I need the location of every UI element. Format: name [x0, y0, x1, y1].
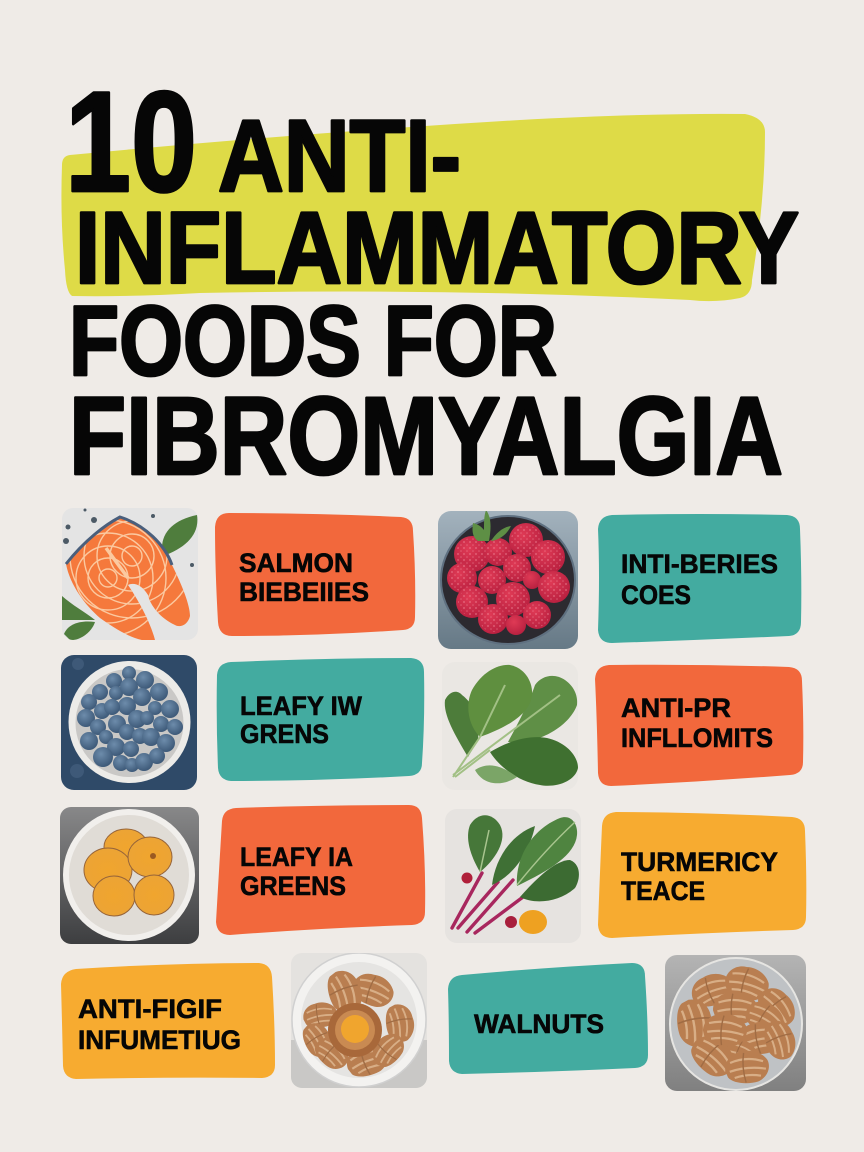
icon: lower leaf	[490, 737, 578, 786]
icon: bowl	[670, 958, 802, 1090]
panel: spinach image	[442, 662, 578, 790]
title: 10	[65, 63, 197, 222]
icon: right leaf	[508, 676, 577, 742]
icon: bowl	[68, 661, 190, 783]
icon: stems	[453, 685, 560, 777]
panel: anti-figif label: INFUMETIUG	[78, 1025, 241, 1055]
icon: chard leaves	[468, 815, 579, 901]
icon: fruit slices	[84, 829, 174, 916]
title: FOODS FOR	[69, 285, 557, 396]
panel: anti-berries label: INTI-BERIES	[621, 549, 778, 579]
panel: peaches image	[60, 807, 199, 944]
panel: leafy label one: LEAFY IW	[240, 691, 362, 721]
panel: walnuts label	[448, 963, 648, 1074]
icon: plate	[63, 809, 195, 941]
title	[65, 63, 799, 498]
icon: raspberry leaves	[473, 510, 511, 541]
icon: walnuts	[302, 970, 414, 1076]
title: ANTI-	[218, 99, 461, 213]
panel: leafy label two: GREENS	[240, 871, 346, 901]
panel: anti-berries label	[598, 514, 801, 643]
panel: anti-pr label	[595, 665, 803, 786]
panel: walnut plate image	[291, 953, 427, 1088]
panel: turmeric label: TEACE	[621, 876, 705, 906]
panel: anti-berries label: COES	[621, 580, 691, 610]
panel: anti-pr label: ANTI-PR	[621, 693, 731, 723]
panel: walnut bowl image	[665, 955, 806, 1091]
panel: walnuts label: WALNUTS	[474, 1009, 604, 1039]
icon: walnuts	[677, 966, 796, 1084]
panel: chard image	[445, 809, 581, 943]
panel: turmeric label	[598, 812, 806, 938]
panel: leafy label two: LEAFY IA	[240, 842, 353, 872]
panel: anti-figif label	[61, 963, 275, 1079]
panel: salmon label: SALMON	[239, 548, 353, 578]
title highlight	[61, 114, 765, 301]
icon: raspberries	[447, 523, 570, 635]
icon: berries and fruit	[462, 872, 547, 934]
icon: bowl	[441, 516, 575, 644]
icon: central yolk	[328, 1003, 382, 1057]
panel: salmon label: BIEBEIIES	[239, 577, 369, 607]
icon: left leaf	[445, 692, 478, 757]
panel: leafy label two	[216, 805, 425, 935]
panel: anti-figif label: ANTI-FIGIF	[78, 994, 222, 1024]
icon: small leaf	[475, 765, 517, 783]
panel: turmeric label: TURMERICY	[621, 847, 778, 877]
icon: salmon steak	[64, 515, 190, 640]
icon: plate	[292, 953, 426, 1087]
panel: salmon label	[215, 513, 415, 636]
panel: leafy label one	[217, 658, 424, 781]
icon: basil leaf	[162, 515, 197, 556]
icon: lower leaves	[62, 596, 95, 640]
icon: stems	[452, 873, 523, 933]
panel: anti-pr label: INFLLOMITS	[621, 723, 773, 753]
icon: blueberries	[77, 666, 183, 772]
icon: big leaf	[468, 665, 532, 737]
panel: salmon image	[62, 508, 198, 640]
panel: leafy label one: GRENS	[240, 719, 329, 749]
panel: raspberries image	[438, 510, 578, 649]
panel: blueberries image	[61, 655, 197, 790]
